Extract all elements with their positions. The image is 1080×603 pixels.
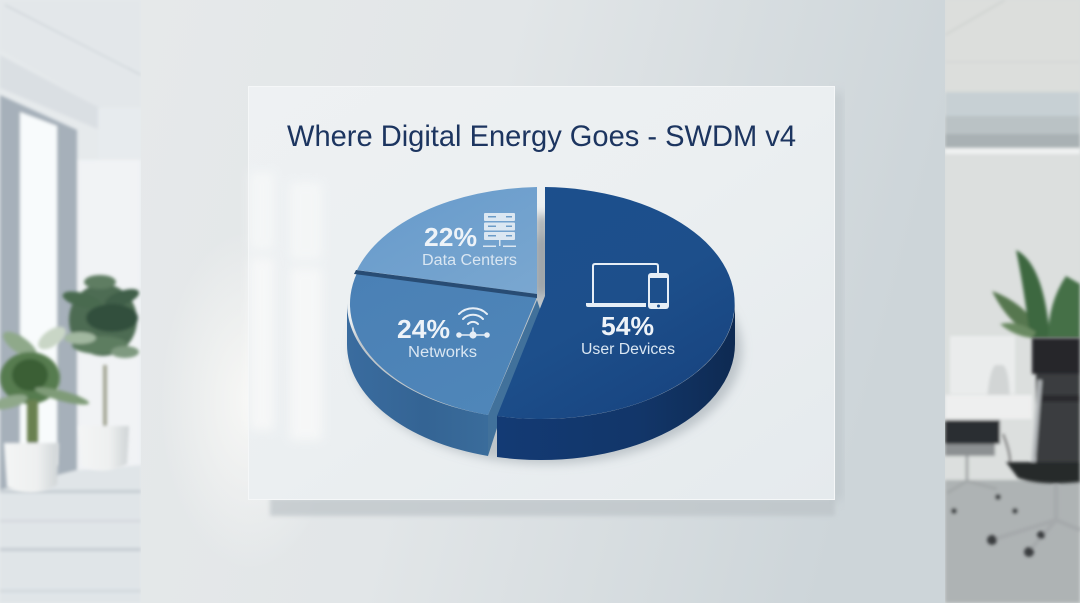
board shadow	[270, 92, 842, 516]
label: user devices	[581, 311, 675, 358]
office chair	[987, 338, 1080, 557]
slice: data centers, 22%	[357, 187, 537, 294]
background: right office	[945, 0, 1080, 603]
slice: user devices side	[497, 303, 735, 460]
label: networks: Networks	[408, 344, 477, 361]
plant: tall tree	[61, 275, 141, 471]
pie chart	[347, 187, 742, 464]
background: left office	[0, 0, 141, 603]
pie drop shadow	[352, 215, 742, 464]
plant: right green	[992, 250, 1080, 338]
separator	[354, 270, 537, 298]
label: user devices: 54%	[601, 311, 654, 341]
wall panel	[141, 0, 945, 603]
label: networks: 24%	[397, 314, 450, 344]
label: data centers	[422, 222, 517, 269]
title: Where Digital Energy Goes - SWDM v4	[287, 120, 796, 153]
label: user devices: User Devices	[581, 341, 675, 358]
icon: laptop and phone	[586, 264, 669, 309]
slice: networks, 24%	[350, 270, 537, 415]
label: data centers: Data Centers	[422, 252, 517, 269]
glass board	[248, 86, 835, 500]
plant: front palm	[0, 322, 90, 493]
icon: server rack	[483, 213, 516, 247]
icon: wifi network	[456, 308, 490, 339]
label: data centers: 22%	[424, 222, 477, 252]
slice: user devices, 54%	[497, 187, 735, 419]
label: networks	[397, 314, 477, 361]
slice: networks side	[347, 300, 541, 456]
